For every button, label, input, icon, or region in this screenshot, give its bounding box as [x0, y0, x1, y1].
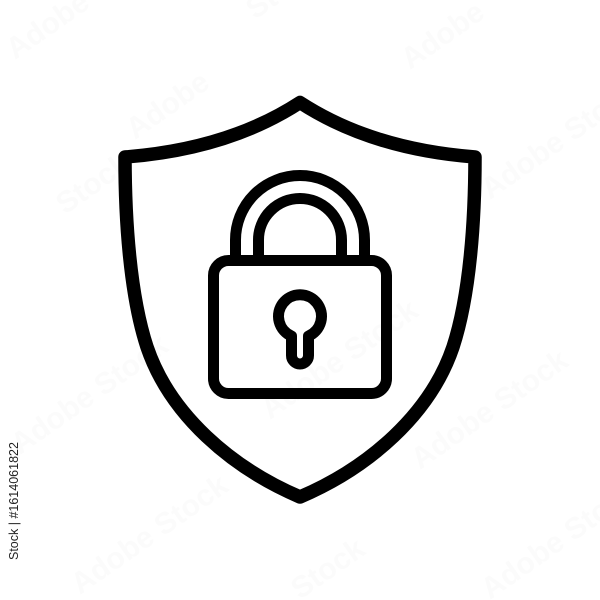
- icon: padlock: [214, 176, 386, 394]
- padlock inner shackle: [258, 198, 342, 258]
- watermark pattern: Adobe Stock: [65, 468, 234, 600]
- padlock body: [214, 260, 386, 394]
- keyhole: [278, 295, 322, 364]
- watermark pattern: Stock: [50, 147, 136, 221]
- watermark pattern: Adobe Stock: [405, 343, 574, 476]
- watermark pattern: Adobe: [120, 65, 215, 146]
- watermark pattern: Adobe Stock: [5, 328, 174, 461]
- padlock outer shackle: [236, 176, 364, 258]
- watermark pattern: Adobe Stock: [255, 293, 424, 426]
- icon: shield outline: [125, 102, 475, 497]
- stock credit text: Stock | #1614061822: [7, 442, 21, 560]
